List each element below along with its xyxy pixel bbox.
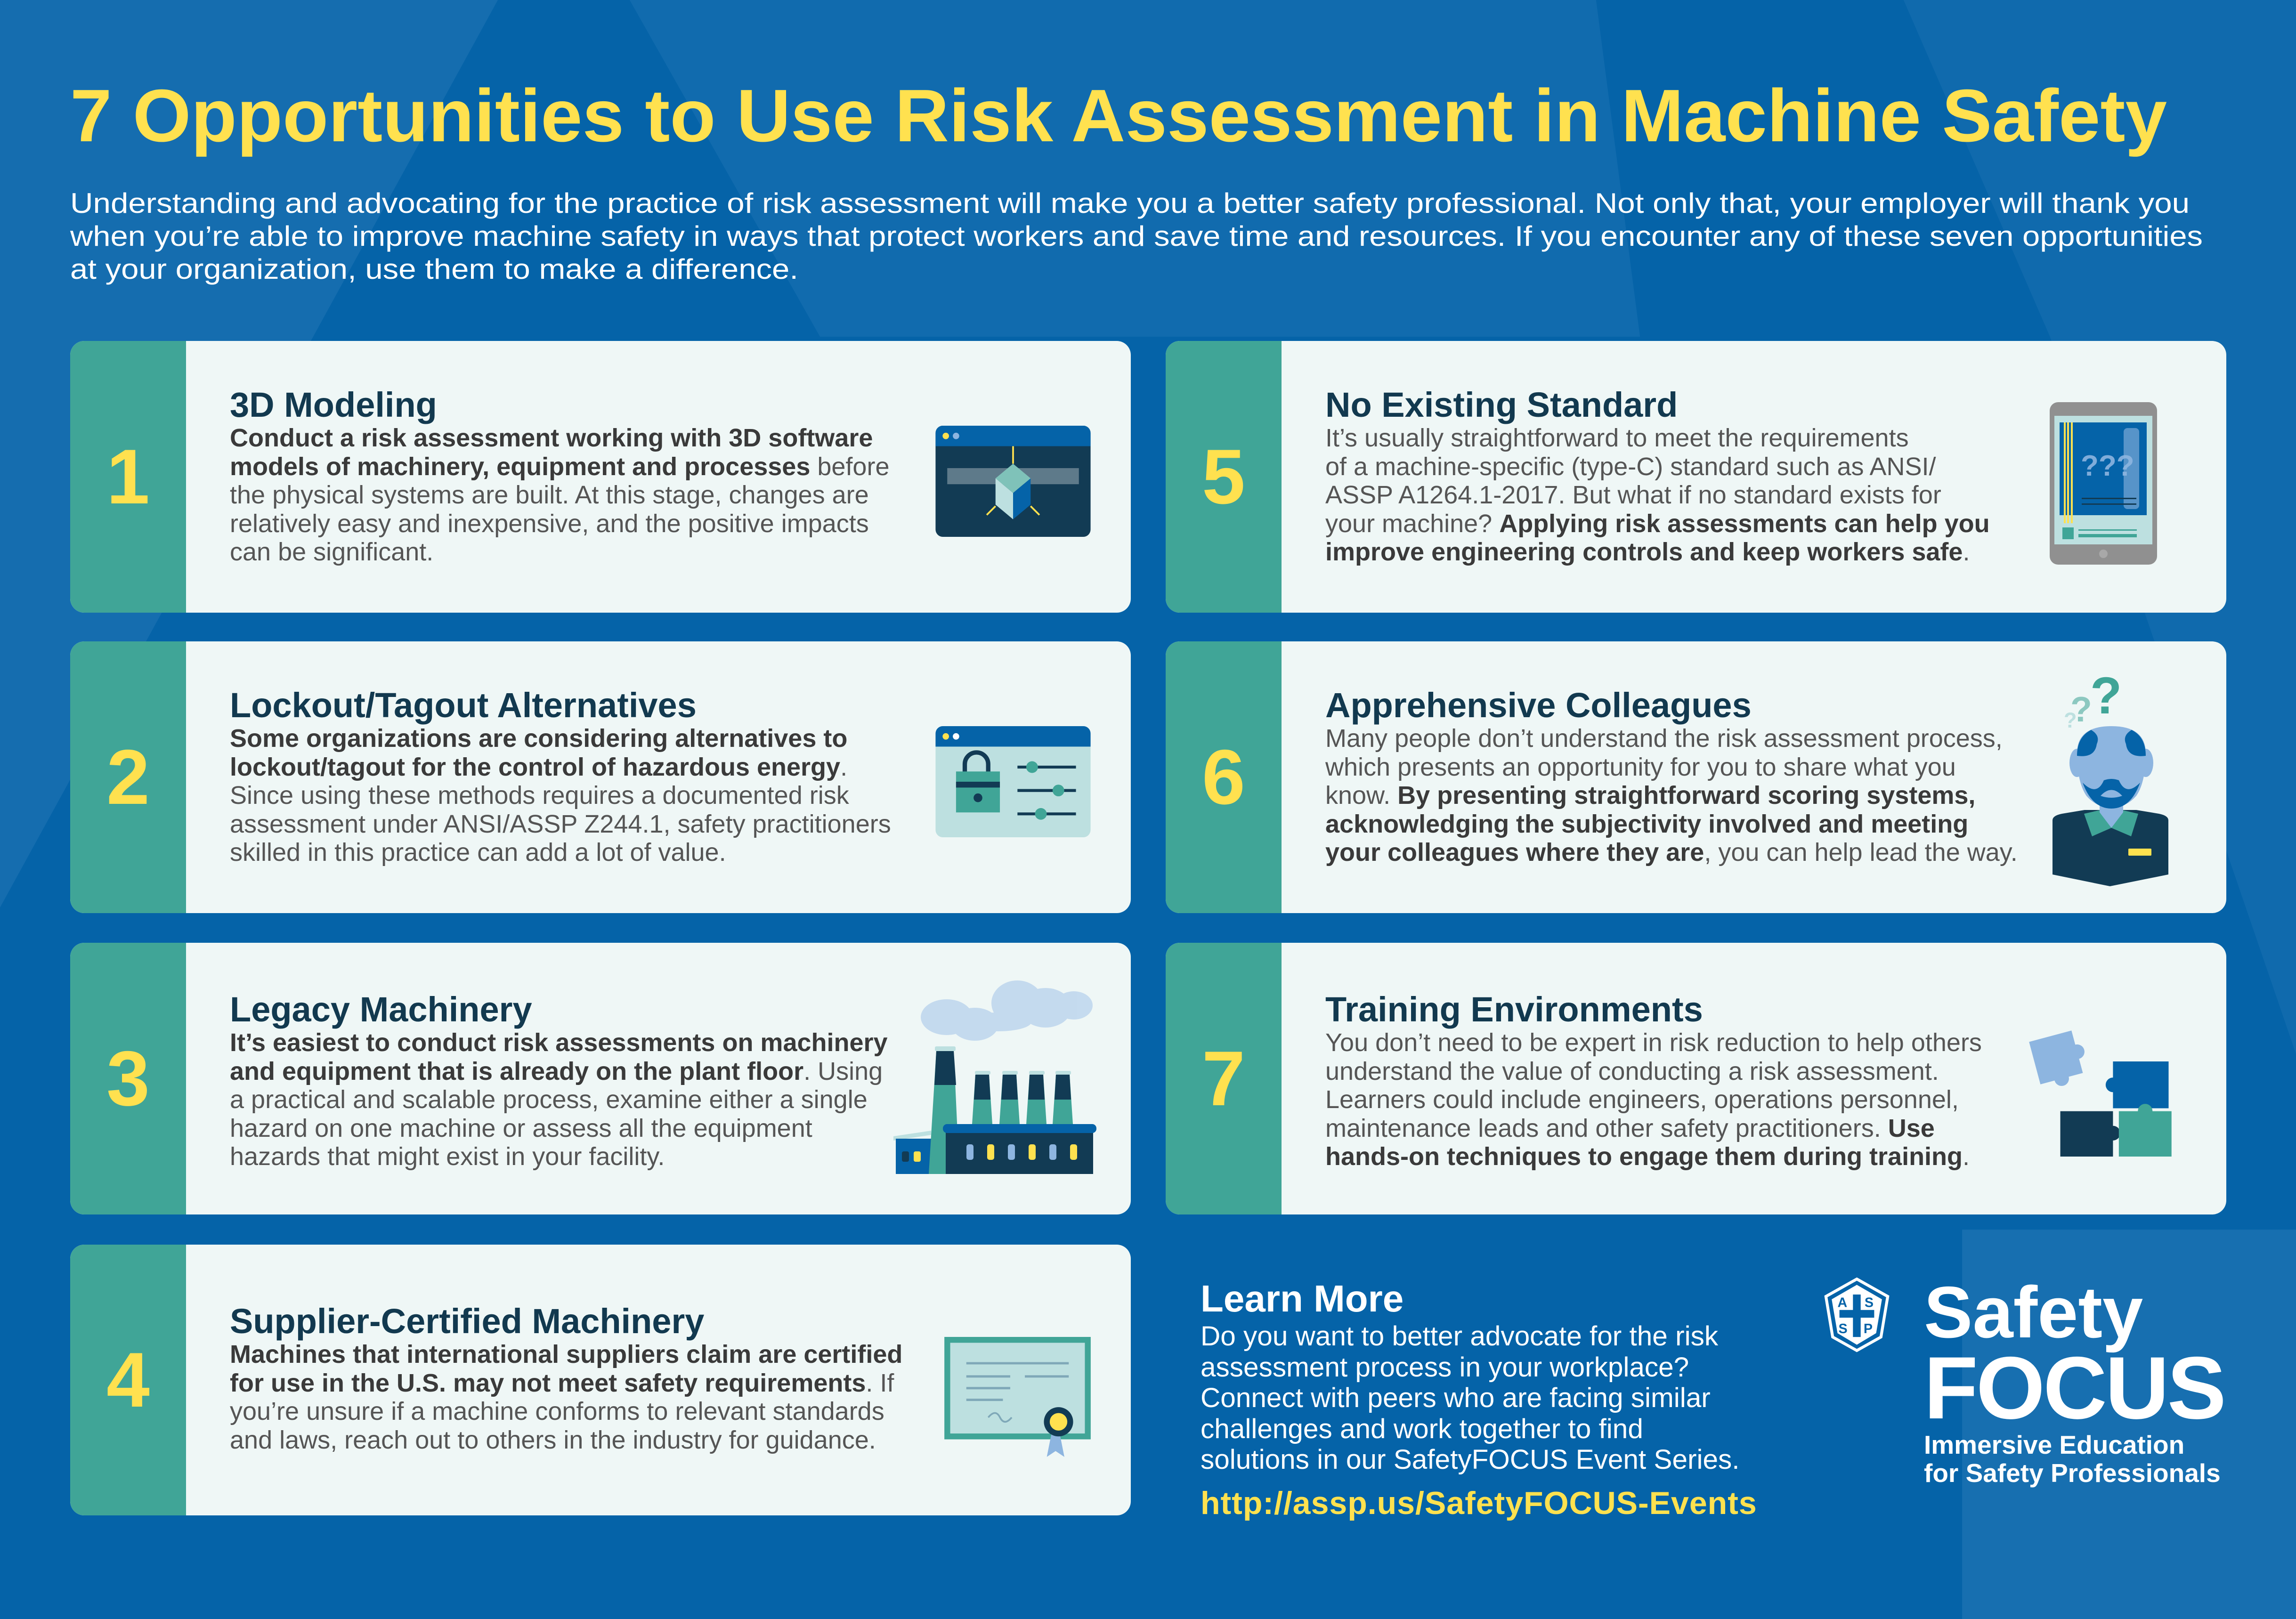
learn more block: challenges and work together to find [1201,1414,1643,1444]
text: No Existing Standard: improve engineering controls and keep workers safe. [1325,538,1970,566]
text: No Existing Standard [1325,386,2008,566]
learn more block [1201,1276,1836,1521]
panel: 2 Lockout/Tagout [70,641,1131,913]
text: Training Environments: Training Environments [1325,990,1703,1029]
text: Apprehensive Colleagues: Many people don’t understand the risk assessment process, [1325,724,2003,753]
icon: person with questions: ? [2064,708,2077,732]
logo: ASSP shield: A [1837,1295,1847,1311]
text: Lockout/Tagout: Lockout/Tagout Alternatives [230,686,697,725]
panel: 3 Legacy Machinery [70,943,1131,1214]
logo: ASSP shield: S [1839,1321,1848,1336]
panel: 4 Supplier-Certified [70,1245,1131,1515]
icon: person with questions [2025,650,2195,895]
icon: 3D window [935,426,1091,537]
icon: person with questions: ? [2070,689,2092,729]
text: No Existing Standard: ASSP A1264.1-2017. But what if no standard exists for [1325,481,1941,509]
text: Lockout/Tagout [230,687,913,866]
intro text [70,187,2203,285]
text: Supplier-Certified: for use in the U.S. may not meet safety requirements. If [230,1368,894,1397]
text: No Existing Standard: your machine? Applying risk assessments can help you [1325,510,1990,538]
learn more block: assessment process in your workplace? [1201,1352,1689,1383]
logo: Safety FOCUS: Immersive Education [1924,1430,2184,1459]
number 1: 1 [106,433,150,520]
text: Apprehensive Colleagues [1325,687,2008,866]
text: Lockout/Tagout: lockout/tagout for the control of hazardous energy. [230,753,847,781]
intro text: when you’re able to improve machine safety in ways that protect workers and save time and resources. If you encounter any of these seven opportunities [70,220,2203,252]
number 7: 7 [1202,1035,1245,1122]
text: No Existing Standard: No Existing Standard [1325,385,1678,424]
text: Legacy Machinery: hazards that might exist in your facility. [230,1142,665,1171]
text: Apprehensive Colleagues: your colleagues where they are, you can help lead the way. [1325,838,2018,866]
text: Apprehensive Colleagues: acknowledging the subjectivity involved and meeting [1325,810,1968,838]
text: Legacy Machinery [230,991,913,1171]
title: 7 Opportunities to Use Risk Assessment in Machine Safety [70,74,2167,157]
panel: 5 No Existing Standard [1166,341,2226,613]
text: 3D Modeling: relatively easy and inexpensive, and the positive impacts [230,510,869,538]
title [0,0,2296,311]
intro text: Understanding and advocating for the practice of risk assessment will make you a better safety professional. Not only that, your employer will thank you [70,187,2190,219]
text: Legacy Machinery: hazard on one machine or assess all the equipment [230,1114,812,1142]
text: Training Environments: hands-on techniques to engage them during training. [1325,1142,1970,1171]
number 3: 3 [106,1035,150,1122]
number 6: 6 [1202,734,1245,820]
icon: tablet [2025,391,2166,570]
number 5: 5 [1202,433,1245,520]
text: Training Environments: maintenance leads and other safety practitioners. Use [1325,1114,1935,1142]
icon: puzzle pieces [2028,1020,2173,1157]
number 2: 2 [106,734,150,820]
text: Legacy Machinery: and equipment that is already on the plant floor. Using [230,1057,883,1085]
text: Supplier-Certified: and laws, reach out to others in the industry for guidance. [230,1426,876,1454]
text: Lockout/Tagout: Since using these methods requires a documented risk [230,781,849,810]
learn more block: Do you want to better advocate for the risk [1201,1321,1718,1352]
text: Legacy Machinery: Legacy Machinery [230,990,532,1029]
text: Training Environments: understand the value of conducting a risk assessment. [1325,1057,1939,1085]
text: No Existing Standard: It’s usually straightforward to meet the requirements [1325,424,1909,452]
text: 3D Modeling: 3D Modeling [230,385,437,424]
text: Training Environments [1325,991,2008,1171]
text: Apprehensive Colleagues: which presents an opportunity for you to share what you [1325,753,1956,781]
learn more block: solutions in our SafetyFOCUS Event Series. [1201,1444,1740,1475]
logo: Safety FOCUS [1924,1277,2224,1487]
link: http://assp.us/SafetyFOCUS-Events [1201,1485,1757,1521]
text: Lockout/Tagout: skilled in this practice can add a lot of value. [230,838,726,866]
text: No Existing Standard: of a machine-specific (type-C) standard such as ANSI/ [1325,452,1936,480]
panel: 1 3D Modeling [70,341,1131,613]
panel: 6 Apprehensive Colleagues [1166,641,2226,913]
icon: certificate [944,1337,1091,1460]
logo: ASSP shield: S [1865,1295,1874,1311]
icon: factory [885,965,1102,1182]
icon: lock and sliders [935,726,1091,837]
text: Supplier-Certified: Supplier-Certified Machinery [230,1302,704,1341]
text: 3D Modeling: the physical systems are built. At this stage, changes are [230,481,869,509]
logo: ASSP shield [1823,1277,1891,1352]
text: 3D Modeling: can be significant. [230,538,433,566]
text: Supplier-Certified [230,1303,913,1454]
logo: ASSP shield: P [1864,1321,1873,1336]
text: Lockout/Tagout: assessment under ANSI/ASSP Z244.1, safety practitioners [230,810,891,838]
learn more block: Learn More [1201,1278,1404,1319]
intro text: at your organization, use them to make a difference. [70,253,798,285]
text: 3D Modeling [230,386,913,566]
text: Legacy Machinery: It’s easiest to conduct risk assessments on machinery [230,1028,888,1057]
number 4: 4 [106,1336,150,1423]
text: 3D Modeling: models of machinery, equipment and processes before [230,452,889,480]
text: Lockout/Tagout: Some organizations are considering alternatives to [230,724,847,753]
text: Supplier-Certified: Machines that international suppliers claim are certified [230,1340,902,1368]
text: Apprehensive Colleagues: know. By presenting straightforward scoring systems, [1325,781,1975,810]
logo: Safety FOCUS: for Safety Professionals [1924,1458,2221,1488]
panel: 7 Training Environments [1166,943,2226,1214]
text: Supplier-Certified: you’re unsure if a machine conforms to relevant standards [230,1397,884,1425]
logo: Safety FOCUS: Safety [1924,1271,2143,1353]
learn more block: Connect with peers who are facing similar [1201,1383,1711,1413]
icon: person with questions: ? [2090,667,2122,725]
text: Legacy Machinery: a practical and scalable process, examine either a single [230,1085,868,1114]
text: 3D Modeling: Conduct a risk assessment working with 3D software [230,424,873,452]
icon: tablet: ??? [2081,450,2134,482]
logo: Safety FOCUS: FOCUS [1924,1338,2224,1437]
text: Apprehensive Colleagues: Apprehensive Colleagues [1325,686,1752,725]
text: Training Environments: Learners could include engineers, operations personnel, [1325,1085,1959,1114]
text: Training Environments: You don’t need to be expert in risk reduction to help others [1325,1028,1982,1057]
